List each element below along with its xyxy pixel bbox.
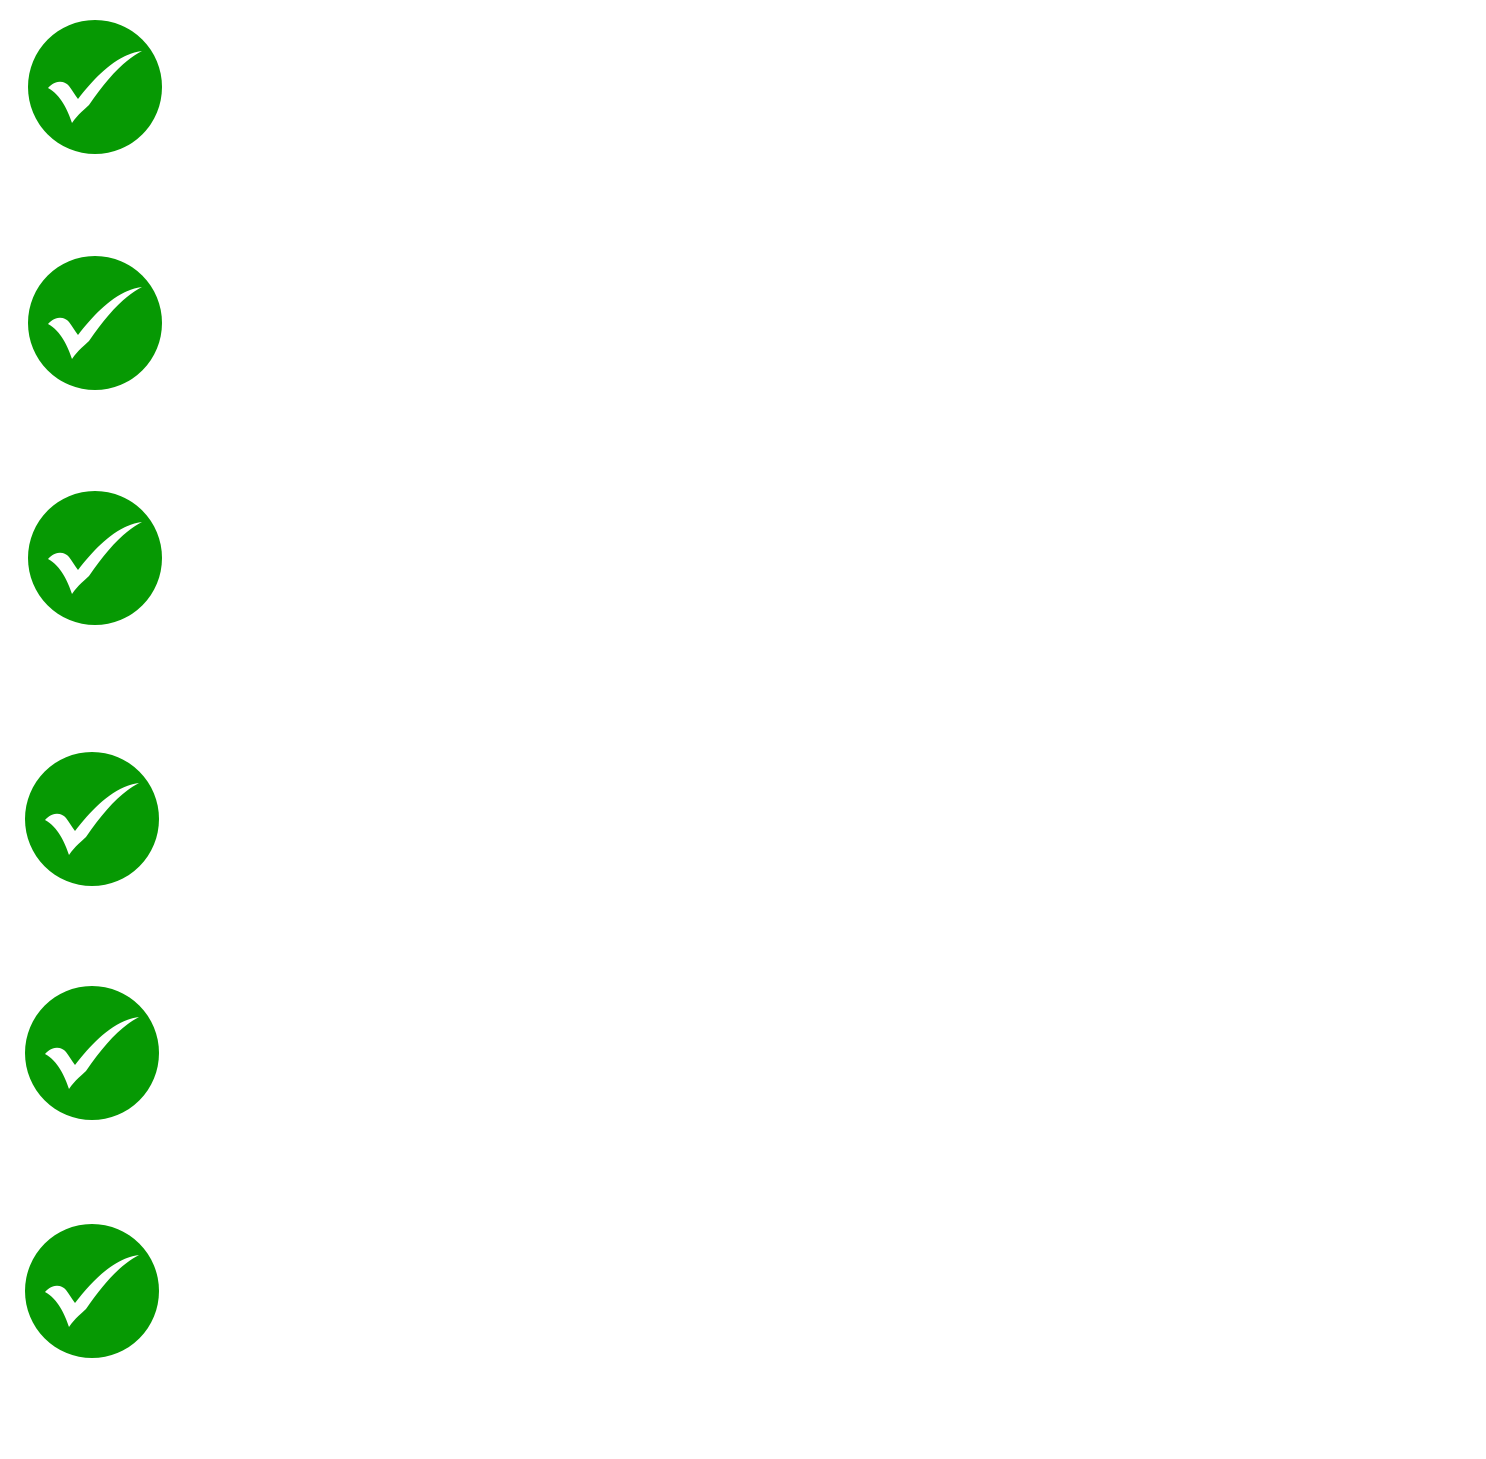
icon: check 1: [28, 20, 162, 154]
icon: check 5: [25, 986, 159, 1120]
icon: check 3: [28, 491, 162, 625]
icon: check 6: [25, 1224, 159, 1358]
icon: check 2: [28, 256, 162, 390]
icon: check 4: [25, 752, 159, 886]
